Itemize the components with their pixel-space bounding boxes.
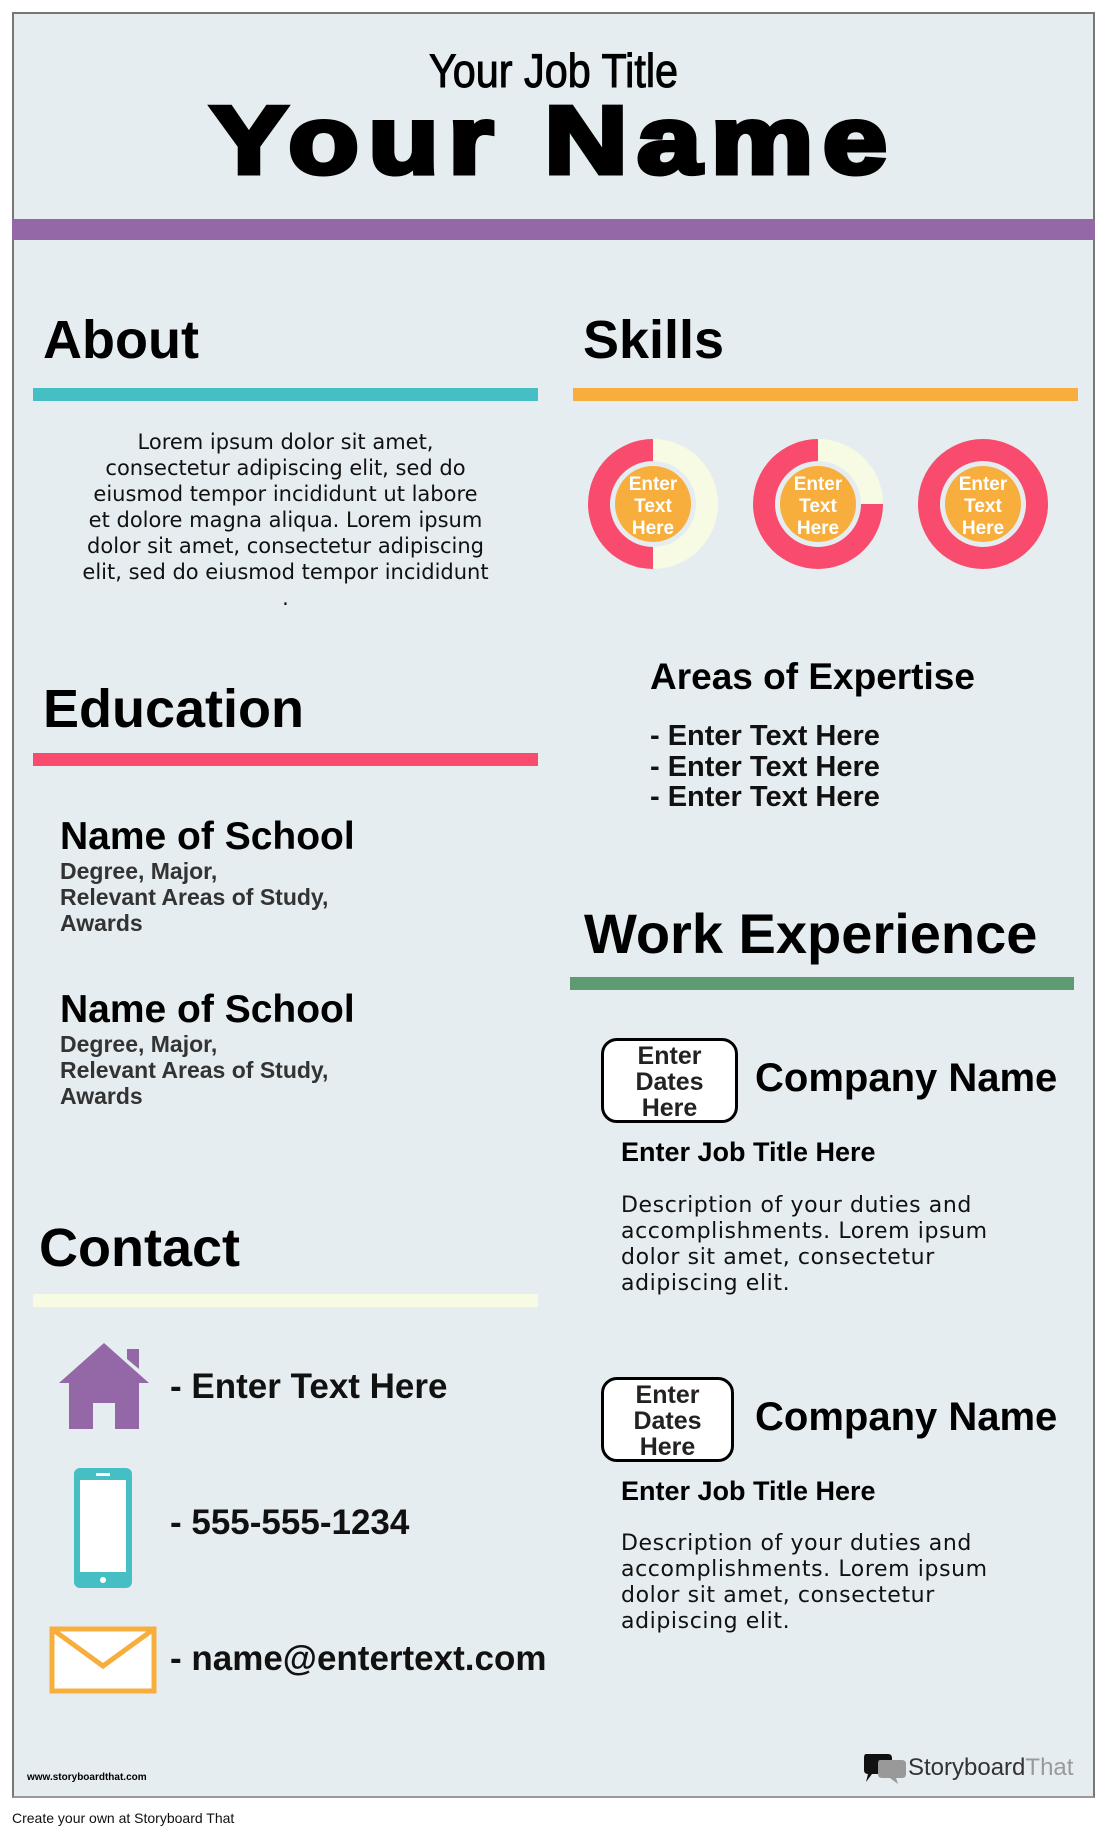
donut 3: Text	[964, 496, 1002, 517]
About text: Lorem ipsum dolor sit amet,	[138, 430, 433, 454]
date box 2	[601, 1377, 734, 1462]
date box 1	[601, 1038, 738, 1123]
About text: dolor sit amet, consectetur adipiscing	[87, 534, 484, 558]
donut 2: Text	[799, 496, 837, 517]
About text: et dolore magna aliqua. Lorem ipsum	[89, 508, 482, 532]
About text: consectetur adipiscing elit, sed do	[105, 456, 466, 480]
About text: .	[282, 586, 289, 610]
donut 1: Enter	[629, 474, 678, 495]
date box 1: Dates	[635, 1068, 704, 1096]
text: StoryboardThat	[908, 1754, 1073, 1781]
icon: envelope	[50, 1626, 156, 1694]
donut 1: Here	[632, 518, 674, 539]
donut 3	[918, 439, 1048, 569]
description 2: Description of your duties and	[621, 1531, 972, 1556]
areas of expertise: Areas of Expertise	[650, 656, 975, 697]
description 1	[621, 1193, 988, 1296]
About text: elit, sed do eiusmod tempor incididunt	[82, 560, 489, 584]
contact phone: - 555-555-1234	[170, 1503, 409, 1542]
company 2: Company Name	[755, 1395, 1057, 1439]
icon: house	[59, 1343, 149, 1429]
Contact heading: Contact	[39, 1218, 240, 1278]
description 1: dolor sit amet, consectetur	[621, 1245, 935, 1270]
donut 1	[588, 439, 718, 569]
logo	[864, 1754, 1074, 1784]
school 1: Degree, Major,	[60, 858, 217, 884]
description 2: dolor sit amet, consectetur	[621, 1583, 935, 1608]
school 2: Name of School	[60, 988, 355, 1031]
areas of expertise: - Enter Text Here	[650, 781, 880, 813]
school 1	[60, 815, 355, 936]
Education heading: Education	[43, 679, 304, 739]
description 1: adipiscing elit.	[621, 1271, 790, 1296]
job title 2: Enter Job Title Here	[621, 1476, 876, 1506]
description 1: Description of your duties and	[621, 1193, 972, 1218]
school 2: Relevant Areas of Study,	[60, 1057, 328, 1083]
areas of expertise	[650, 656, 975, 813]
school 2	[60, 988, 355, 1109]
job title 1: Enter Job Title Here	[621, 1137, 876, 1167]
date box 2: Enter	[636, 1381, 699, 1409]
description 1: accomplishments. Lorem ipsum	[621, 1219, 988, 1244]
areas of expertise: - Enter Text Here	[650, 750, 880, 782]
job 2	[601, 1377, 1057, 1634]
donut 1: Text	[634, 496, 672, 517]
school 1: Name of School	[60, 815, 355, 858]
school 2: Degree, Major,	[60, 1031, 217, 1057]
school 1: Awards	[60, 910, 143, 936]
date box 1: Here	[642, 1094, 697, 1122]
donut 2: Here	[797, 518, 839, 539]
date box 2: Dates	[633, 1407, 702, 1435]
icon: phone	[74, 1468, 132, 1588]
job 1	[601, 1038, 1057, 1296]
description 2: adipiscing elit.	[621, 1609, 790, 1634]
areas of expertise: - Enter Text Here	[650, 720, 880, 752]
school 1: Relevant Areas of Study,	[60, 884, 328, 910]
contact email: - name@entertext.com	[170, 1639, 546, 1678]
donut 3: Here	[962, 518, 1004, 539]
name: Your Name	[210, 87, 897, 194]
school 2: Awards	[60, 1083, 143, 1109]
skill donuts	[588, 439, 1048, 569]
description 2	[621, 1531, 988, 1634]
donut 2	[753, 439, 883, 569]
footer url: www.storyboardthat.com	[27, 1772, 147, 1783]
date box 2: Here	[640, 1433, 695, 1461]
description 2: accomplishments. Lorem ipsum	[621, 1557, 988, 1582]
About heading: About	[43, 310, 199, 370]
date box 1: Enter	[638, 1042, 701, 1070]
Skills heading: Skills	[583, 310, 724, 370]
company 1: Company Name	[755, 1056, 1057, 1100]
Work Experience heading: Work Experience	[584, 902, 1037, 965]
contact address: - Enter Text Here	[170, 1367, 448, 1406]
job title: Your Job Title	[429, 44, 678, 97]
donut 3: Enter	[959, 474, 1008, 495]
footer credit: Create your own at Storyboard That	[12, 1810, 234, 1826]
purple band	[12, 219, 1095, 240]
donut 2: Enter	[794, 474, 843, 495]
About text	[82, 430, 489, 610]
About text: eiusmod tempor incididunt ut labore	[93, 482, 478, 506]
